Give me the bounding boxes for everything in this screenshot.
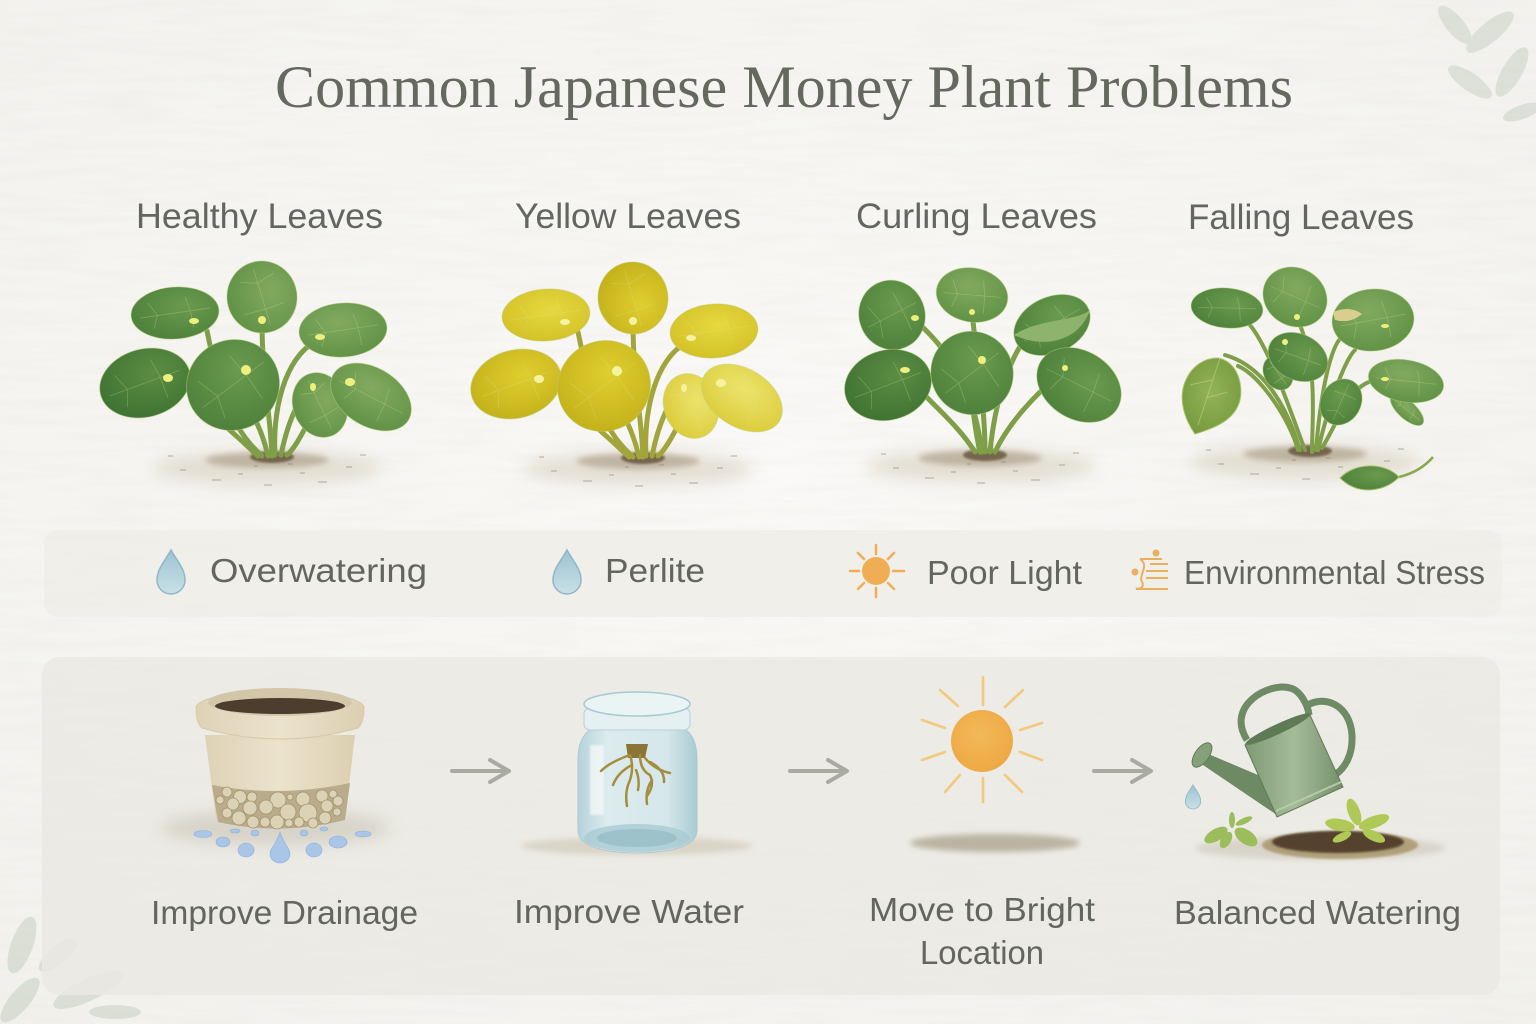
heading: Curling Leaves: Curling Leaves <box>856 197 1097 236</box>
icon: water drop <box>157 550 185 594</box>
illustration: watering can with seedlings <box>1185 687 1445 860</box>
panel: causes band <box>44 530 1502 617</box>
roots <box>601 744 670 806</box>
plant: healthy <box>92 255 424 485</box>
icon: water drop 2 <box>553 550 581 594</box>
corner foliage: bottom left <box>0 913 141 1024</box>
arrow 1 <box>452 760 509 782</box>
corner foliage: top right <box>1433 1 1536 125</box>
illustration: pot with drainage stones <box>160 688 390 863</box>
plant: falling <box>1182 255 1447 490</box>
title: Common Japanese Money Plant Problems <box>275 54 1293 120</box>
arrow 2 <box>790 760 847 782</box>
plant: curling <box>836 262 1135 483</box>
cause: Perlite: Perlite <box>605 552 705 589</box>
fallen leaf <box>1340 457 1433 490</box>
label: Improve Drainage: Improve Drainage <box>151 894 418 931</box>
cause: Overwatering: Overwatering <box>210 552 427 589</box>
label: Improve Water: Improve Water <box>514 893 744 930</box>
heading: Falling Leaves: Falling Leaves <box>1188 198 1414 237</box>
icon: environmental stress <box>1132 550 1168 589</box>
plant: yellow <box>463 256 795 486</box>
label: Balanced Watering: Balanced Watering <box>1174 894 1461 931</box>
label: Move to Bright Location <box>869 891 1095 971</box>
cause: Environmental Stress: Environmental Stress <box>1184 554 1485 591</box>
water droplets <box>194 827 371 863</box>
label: Move to Bright Location: Location <box>920 934 1044 971</box>
arrow 3 <box>1094 760 1151 782</box>
label: Move to Bright Location: Move to Bright <box>869 891 1095 928</box>
illustration: glass jar with roots <box>522 692 752 855</box>
heading: Yellow Leaves: Yellow Leaves <box>515 197 741 236</box>
heading: Healthy Leaves: Healthy Leaves <box>136 197 383 236</box>
seedlings <box>1202 812 1261 850</box>
cause: Poor Light: Poor Light <box>927 554 1082 591</box>
icon: small sun <box>850 545 904 597</box>
illustration: bright sun <box>910 677 1080 852</box>
panel: solutions <box>42 657 1500 995</box>
